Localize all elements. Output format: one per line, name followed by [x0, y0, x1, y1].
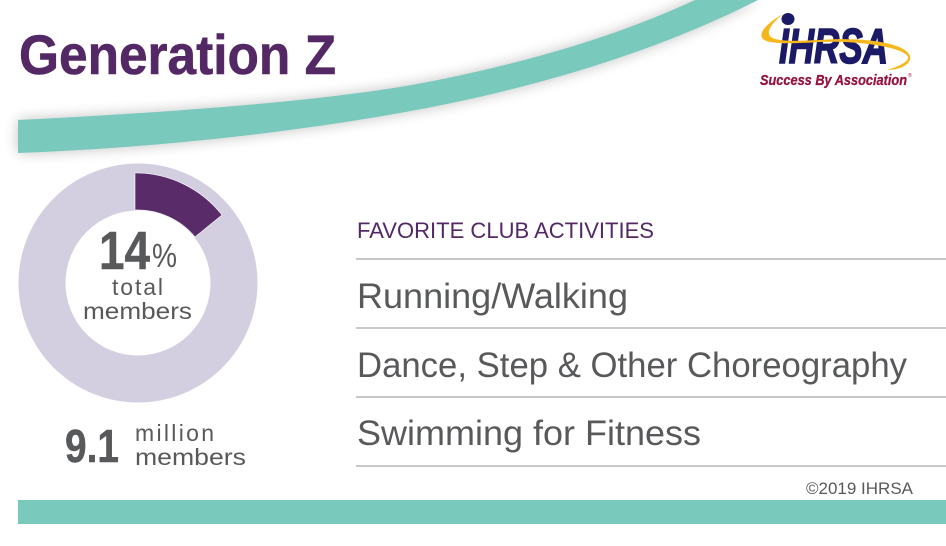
member count: 9.1 [65, 420, 119, 472]
logo tagline: Success By Association [760, 72, 907, 89]
member count: members [135, 444, 246, 470]
member count: million [135, 420, 214, 446]
copyright: ©2019 IHRSA [806, 479, 914, 498]
bottom teal bar [18, 500, 946, 524]
donut chart [42, 173, 234, 379]
percentage value: % [152, 237, 177, 274]
logo registered mark: ® [908, 72, 912, 79]
donut label: total [112, 274, 163, 300]
activity: dance: Dance, Step & Other Choreography [357, 346, 907, 385]
activity: running: Running/Walking [357, 277, 628, 316]
percentage value: 14 [99, 221, 150, 281]
teal swoosh band [18, 0, 758, 153]
logo dot [782, 13, 794, 25]
activities heading: FAVORITE CLUB ACTIVITIES [357, 218, 654, 243]
donut label [83, 274, 192, 324]
logo wordmark: IHRSA [779, 20, 888, 74]
activity: swimming: Swimming for Fitness [357, 414, 701, 453]
donut ring [42, 187, 234, 379]
logo: IHRSA [760, 13, 912, 89]
activities list [356, 259, 946, 466]
donut highlighted segment: 14% [135, 173, 222, 237]
logo swoosh [761, 14, 910, 70]
donut label: members [83, 298, 192, 324]
member count [65, 420, 246, 472]
title: Generation Z [19, 23, 336, 86]
divider lines [356, 259, 946, 466]
